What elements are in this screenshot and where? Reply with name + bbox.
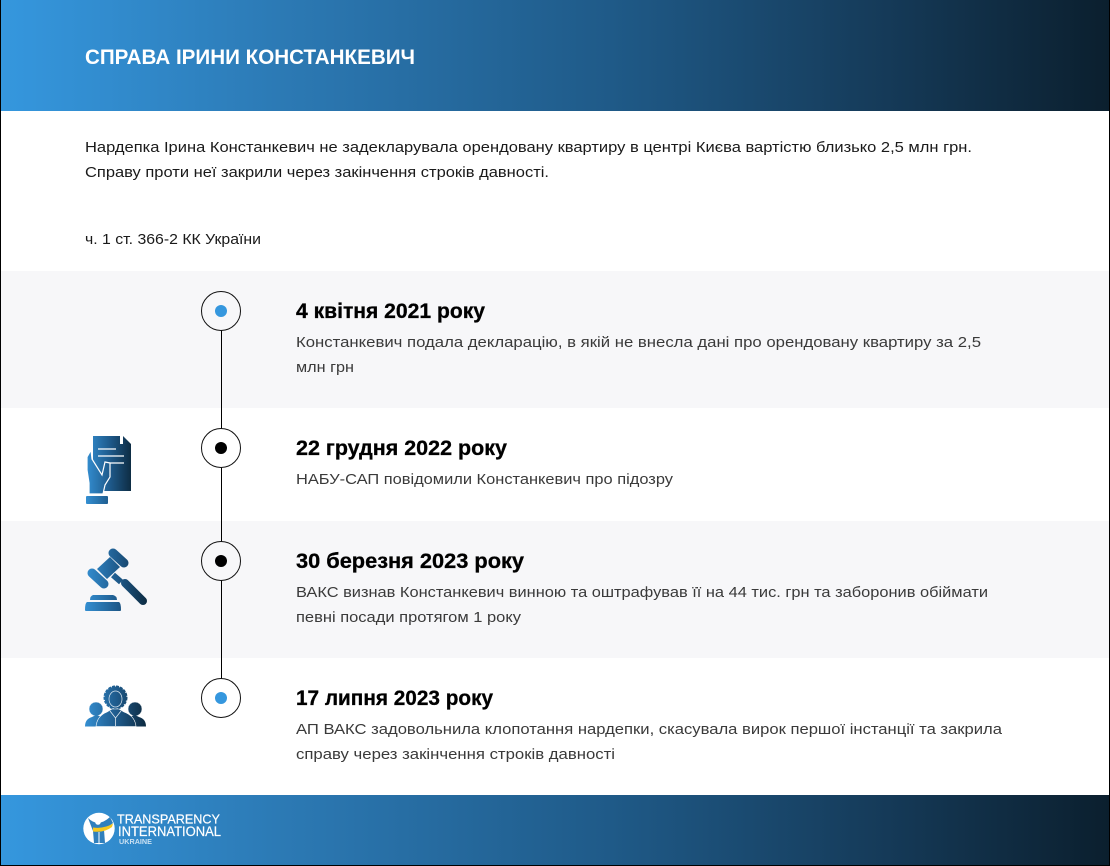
timeline marker 1: [202, 292, 240, 330]
event 1: Констанкевич подала декларацію, в якій не внесла дані про орендовану квартиру за 2,5: [296, 334, 981, 351]
intro text: Нардепка Ірина Констанкевич не задекларувала орендовану квартиру в центрі Києва вартістю близько 2,5 млн грн.: [85, 139, 972, 156]
event 3: 30 березня 2023 року: [296, 550, 524, 573]
event 3: ВАКС визнав Констанкевич винною та оштрафував її на 44 тис. грн та заборонив обіймати: [296, 584, 988, 601]
event 4: [296, 687, 1003, 763]
event 3: [296, 550, 988, 626]
logo: Transparency International Ukraine: [83, 812, 221, 846]
event 3: певні посади протягом 1 року: [296, 609, 522, 626]
timeline marker 3: [202, 542, 240, 580]
timeline marker 4: [202, 678, 240, 718]
icon: judge gavel: [85, 553, 143, 611]
timeline marker 2: [202, 428, 240, 468]
event 1: 4 квітня 2021 року: [296, 300, 485, 323]
footer banner: [1, 795, 1109, 865]
logo: Transparency International Ukraine: UKRAINE: [119, 837, 152, 846]
intro text: Справу проти неї закрили через закінчення строків давності.: [85, 164, 549, 181]
event 2: НАБУ-САП повідомили Констанкевич про підозру: [296, 471, 674, 488]
icon: hand holding document: [86, 436, 131, 504]
intro text: [85, 139, 972, 181]
event 2: [296, 437, 674, 488]
timeline line: [221, 330, 222, 680]
event 1: [296, 300, 981, 376]
event 4: АП ВАКС задовольнила клопотання нардепки, скасувала вирок першої інстанції та закрила: [296, 721, 1003, 738]
title: СПРАВА ІРИНИ КОНСТАНКЕВИЧ: [85, 46, 415, 69]
header banner: [1, 0, 1109, 111]
event 1: млн грн: [296, 359, 354, 376]
event 4: справу через закінчення строків давності: [296, 746, 615, 763]
event 4: 17 липня 2023 року: [296, 687, 493, 710]
logo: Transparency International Ukraine: TRANSPARENCY: [117, 812, 220, 826]
legal article reference: ч. 1 ст. 366-2 КК України: [85, 231, 261, 248]
event 2: 22 грудня 2022 року: [296, 437, 507, 460]
logo: Transparency International Ukraine: INTERNATIONAL: [118, 824, 221, 839]
panel: row backgrounds: [1, 271, 1109, 658]
icon: group of judges: [85, 686, 146, 726]
